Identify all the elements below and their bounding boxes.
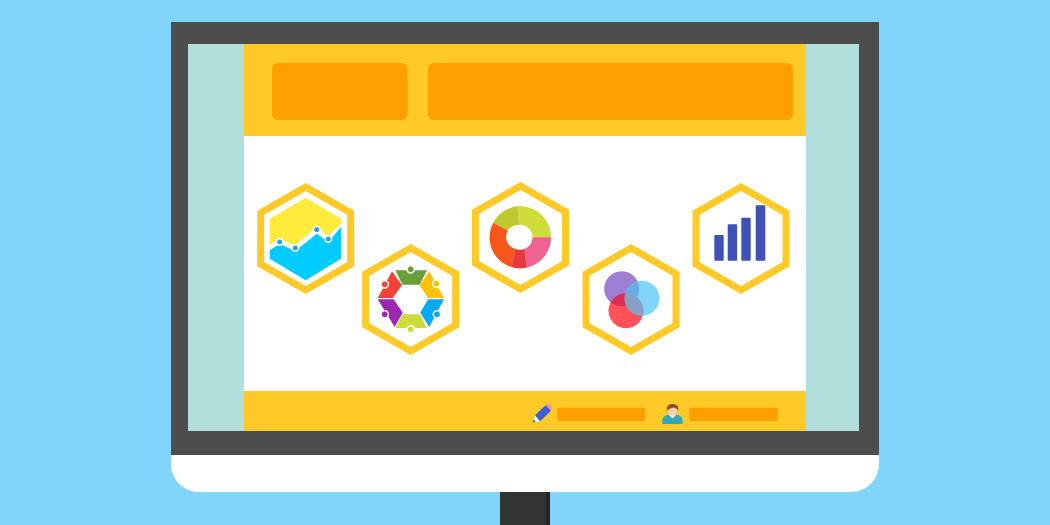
venn circles [604, 271, 639, 306]
monitor bezel [171, 22, 879, 455]
header title placeholder [428, 63, 793, 120]
left sidebar [188, 44, 244, 431]
area: blue [270, 227, 341, 280]
hexagon: segmented ring [366, 248, 456, 351]
bars [714, 205, 765, 261]
monitor white base [171, 455, 879, 492]
icon: person [662, 404, 683, 424]
ring nodes [381, 266, 441, 333]
venn overlaps [610, 282, 644, 316]
area: yellow [270, 198, 341, 245]
hexagon: area line chart [261, 187, 351, 290]
data points [276, 226, 332, 251]
monitor stand [500, 490, 550, 525]
donut segments [517, 206, 551, 237]
hexagon: bar chart [696, 187, 786, 290]
footer band [244, 391, 806, 431]
footer author placeholder 2 [689, 408, 778, 421]
main white screen [244, 136, 806, 391]
hexagon: donut chart [476, 186, 566, 289]
header band [244, 44, 806, 136]
hexagon: venn diagram [586, 248, 676, 351]
footer author placeholder 1 [557, 408, 645, 421]
illustration: desktop monitor with dashboard [171, 22, 879, 525]
ring segments [395, 270, 427, 285]
header logo placeholder [272, 63, 408, 120]
right sidebar [806, 44, 859, 431]
icon: pencil [533, 403, 552, 422]
